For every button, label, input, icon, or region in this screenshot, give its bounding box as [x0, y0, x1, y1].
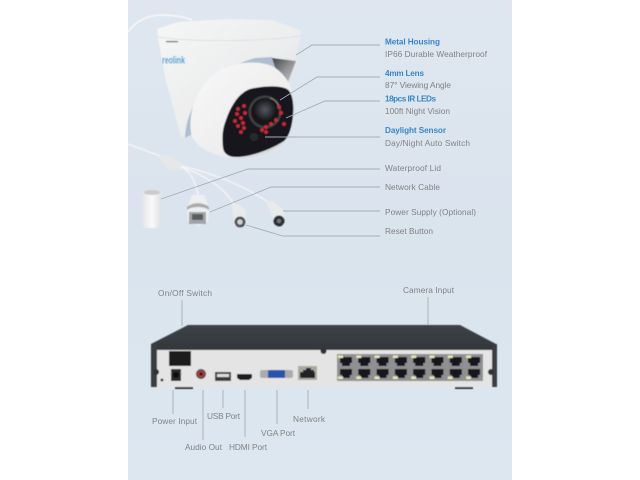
NVR foot right	[455, 387, 473, 389]
label: IR LEDs: 100ft Night Vision	[385, 106, 450, 116]
label: audio out: Audio Out	[185, 442, 223, 452]
housing inner dark gap	[272, 58, 296, 82]
NVR rear face	[157, 350, 492, 387]
camera housing	[157, 19, 301, 138]
NVR recorder	[151, 325, 497, 389]
background panel	[128, 0, 512, 480]
reset pinhole	[161, 379, 163, 381]
label: camera input: Camera Input	[403, 285, 455, 295]
brand logo: reolink	[162, 56, 185, 66]
housing rim	[158, 36, 301, 41]
cable splitter	[160, 155, 182, 170]
VGA port	[260, 370, 293, 378]
label: 4mm lens	[385, 69, 451, 90]
NVR foot left	[175, 387, 193, 389]
label: on/off switch: On/Off Switch	[158, 288, 212, 298]
label: IR LEDs: 18pcs IR LEDs	[385, 94, 436, 104]
lens	[248, 96, 282, 128]
callout lines: camera	[161, 45, 380, 236]
label: daylight sensor: Day/Night Auto Switch	[385, 138, 470, 148]
label: reset button: Reset Button	[385, 226, 433, 236]
label: USB port: USB Port	[207, 411, 241, 421]
label: 4mm lens: 4mm Lens	[385, 69, 424, 78]
label: IR LEDs	[385, 94, 450, 116]
label: daylight sensor	[385, 126, 470, 148]
main cable	[128, 144, 160, 156]
HDMI port	[237, 374, 252, 380]
audio out	[196, 369, 206, 379]
cable assembly	[128, 144, 284, 228]
waterproof lid	[143, 190, 161, 228]
housing inner crescent	[185, 57, 284, 138]
IR LEDs	[233, 104, 286, 134]
branch cables	[181, 166, 268, 205]
label: metal housing	[385, 38, 488, 59]
daylight sensor	[250, 133, 258, 141]
label: metal housing: Metal Housing	[385, 38, 440, 46]
NVR side brackets	[151, 344, 497, 387]
label: metal housing: IP66 Durable Weatherproof	[385, 49, 488, 59]
camera cable	[128, 15, 192, 32]
network port	[298, 366, 317, 380]
camera ball	[190, 62, 293, 159]
USB port	[215, 372, 231, 381]
dome camera	[128, 15, 301, 159]
label: VGA port: VGA Port	[261, 428, 296, 438]
screws	[153, 348, 494, 375]
label: power supply: Power Supply (Optional)	[385, 207, 476, 217]
on/off switch	[169, 351, 191, 366]
label: daylight sensor: Daylight Sensor	[385, 126, 447, 135]
housing slot	[166, 41, 178, 42]
network connector	[187, 195, 209, 226]
label: network: Network	[293, 414, 326, 424]
label: HDMI port: HDMI Port	[229, 442, 268, 452]
camera face	[222, 86, 293, 157]
label: network cable: Network Cable	[385, 182, 440, 192]
label: power input: Power Input	[152, 416, 198, 426]
power connector	[266, 201, 284, 227]
power jack	[171, 369, 181, 381]
label: 4mm lens: 87° Viewing Angle	[385, 80, 451, 90]
PoE port block	[337, 354, 483, 381]
NVR top	[151, 325, 497, 350]
label: waterproof lid: Waterproof Lid	[385, 163, 441, 173]
callout lines: NVR	[173, 297, 428, 440]
BNC connector	[232, 204, 246, 228]
